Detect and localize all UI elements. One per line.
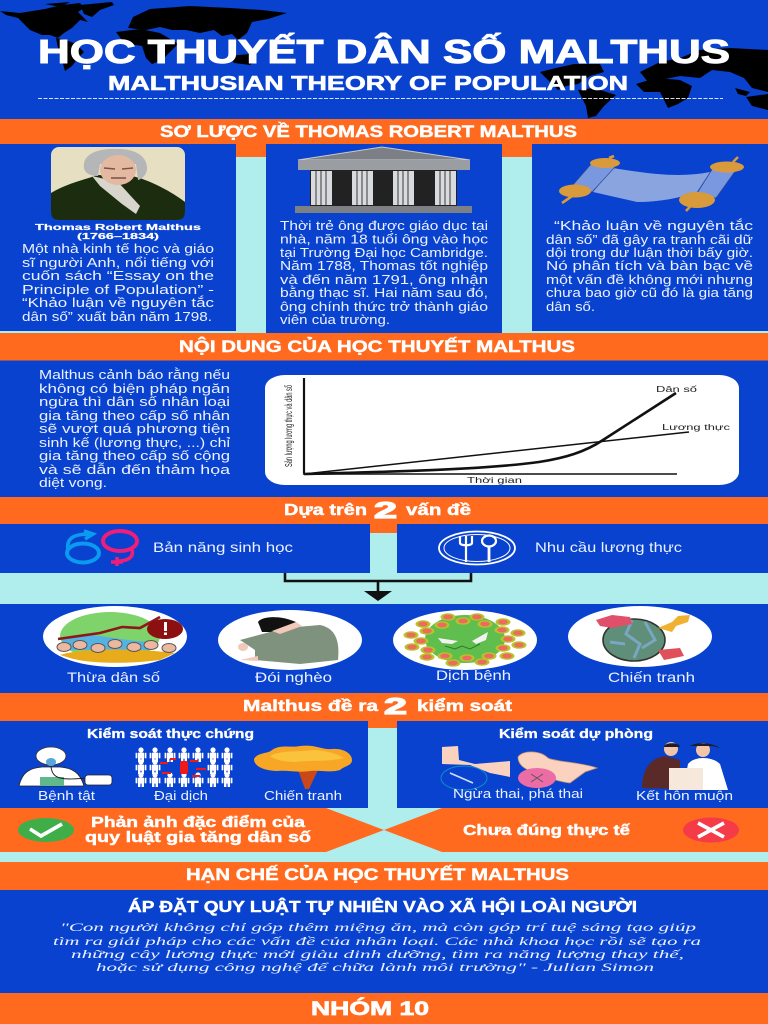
text: reflects population law [85, 814, 311, 846]
icon: gender symbols [67, 531, 137, 566]
chart labels: Sản lượng lương thực và dân số [283, 385, 295, 467]
chart labels: Dân số [656, 384, 697, 394]
icon: sick patient [19, 747, 112, 786]
icon: couple [642, 742, 728, 790]
essay text [546, 218, 754, 314]
biography text: dân số” xuất bản năm 1798. [22, 309, 212, 324]
footer: group name: NHÓM 10 [311, 998, 429, 1020]
theory text: và sẽ dẫn đến thảm họa [39, 462, 231, 477]
heading: theory content: NỘI DUNG CỦA HỌC THUYẾT MALTHUS [179, 337, 575, 356]
heading: two controls: Malthus đề ra [243, 698, 378, 715]
theory text: sẽ vượt quá phương tiện [39, 421, 230, 436]
evaluation: reflects population law [0, 808, 384, 852]
panel: preventive checks [397, 721, 768, 808]
icon: overpopulation [43, 606, 187, 667]
theory text [39, 367, 231, 490]
icon: epidemic crowd [136, 747, 232, 787]
heading: positive checks: Kiểm soát thực chứng [87, 726, 254, 741]
essay text: dội trong dư luận thời bấy giờ. [546, 245, 753, 260]
arrow: merging to consequences [285, 573, 471, 601]
essay text: chưa bao giờ cũ đó là gia tăng [546, 285, 753, 300]
labels: positive checks: Bệnh tật [38, 789, 96, 803]
theory text: gia tăng theo cấp số cộng [39, 448, 230, 463]
biography text: sĩ người Anh, nổi tiếng với [22, 255, 214, 270]
labels: positive checks: Đại dịch [154, 789, 208, 803]
quote: Julian Simon: hoặc sử dụng công nghệ để chữa lành môi trường" - Julian Simon [96, 960, 654, 974]
text: reflects population law: Phản ảnh đặc điểm của [91, 814, 306, 831]
icon: check [18, 818, 74, 842]
portrait caption [35, 223, 202, 241]
icon: cross [683, 818, 739, 842]
theory text: ngừa thì dân số nhân loại [39, 394, 230, 409]
limitation statement: ÁP ĐẶT QUY LUẬT TỰ NHIÊN VÀO XÃ HỘI LOÀI NGƯỜI [128, 896, 637, 916]
theory text: không có biện pháp ngăn [39, 381, 230, 396]
biography text: cuốn sách “Essay on the [22, 268, 214, 283]
heading: two controls [243, 693, 512, 719]
label: biological instinct: Bản năng sinh học [153, 539, 293, 555]
essay text: “Khảo luận về nguyên tắc [554, 218, 754, 233]
icon: contraception [441, 746, 597, 790]
line: population [304, 393, 676, 474]
biography text: Principle of Population” - [22, 282, 214, 297]
panel: essay [532, 144, 768, 331]
quote: Julian Simon: "Con người không chỉ góp thêm miệng ăn, mà còn góp trí tuệ sáng tạo giúp [60, 920, 696, 934]
heading: based on 2 issues: Dựa trên [284, 502, 367, 519]
education text [280, 218, 489, 327]
consequence labels [67, 667, 695, 685]
theory text: Malthus cảnh báo rằng nếu [39, 367, 230, 382]
portrait caption: Thomas Robert Malthus [35, 223, 202, 232]
icon: plate with cutlery [439, 532, 515, 564]
footer band [0, 993, 768, 1024]
heading: two controls: kiểm soát [417, 698, 512, 715]
biography text: Một nhà kinh tế học và giáo [22, 241, 214, 256]
heading: about Malthus: SƠ LƯỢC VỀ THOMAS ROBERT MALTHUS [160, 122, 577, 141]
chart labels [283, 384, 731, 485]
labels: preventive checks: Ngừa thai, phá thai [453, 787, 583, 801]
title: HỌC THUYẾT DÂN SỐ MALTHUS [38, 32, 730, 70]
quote: Julian Simon: những cây lương thực mới giàu dinh dưỡng, tìm ra năng lượng thay thế, [71, 947, 684, 961]
consequence labels: Dịch bệnh [436, 667, 511, 683]
section: limitations [0, 862, 768, 993]
text: not yet realistic: Chưa đúng thực tế [463, 822, 631, 839]
biography text: “Khảo luận về nguyên tắc [22, 295, 215, 310]
icon: poverty [218, 610, 362, 670]
biography text [22, 241, 215, 324]
essay text: một vấn đề không mới nhưng [546, 272, 753, 287]
education text: ông chính thức trở thành giáo [280, 299, 488, 314]
essay text: dân số. [546, 299, 595, 314]
heading: two controls: 2 [384, 693, 407, 719]
labels: positive checks: Chiến tranh [264, 789, 342, 803]
icon: disease virus [393, 610, 537, 670]
section: two issues [0, 497, 768, 604]
education text: tại Trường Đại học Cambridge. [280, 245, 488, 260]
line chart: population vs food [265, 375, 739, 485]
world map background [0, 2, 768, 118]
theory text: gia tăng theo cấp số nhân [39, 408, 230, 423]
education text: nhà, năm 18 tuổi ông vào học [280, 232, 489, 246]
heading: based on 2 issues [284, 497, 471, 523]
consequence labels: Chiến tranh [608, 669, 695, 685]
heading: based on 2 issues: vấn đề [406, 502, 471, 519]
subtitle: MALTHUSIAN THEORY OF POPULATION [108, 73, 628, 95]
chart labels: Thời gian [467, 475, 522, 485]
icon: scroll [559, 156, 744, 211]
quote: Julian Simon [53, 920, 701, 974]
chart labels: Lương thực [662, 422, 731, 432]
icon: university temple [295, 147, 472, 213]
heading: based on 2 issues: 2 [374, 497, 397, 523]
panel: education [266, 144, 502, 333]
section: theory content [0, 333, 768, 490]
consequence labels: Thừa dân số [67, 669, 160, 685]
section: two controls [0, 693, 768, 862]
label: food need: Nhu cầu lương thực [535, 539, 682, 555]
consequence labels: Đói nghèo [255, 669, 332, 685]
panel: biological instinct [0, 524, 370, 573]
education text: Năm 1788, Thomas tốt nghiệp [280, 258, 488, 273]
quote: Julian Simon: tìm ra giải pháp cho các vấn đề của nhân loại. Các nhà khoa học rồi sẽ tạo ra [53, 934, 701, 948]
theory text: diệt vong. [39, 475, 107, 490]
essay text: dân số” đã gây ra tranh cãi dữ [546, 232, 753, 247]
labels: preventive checks [453, 787, 733, 803]
heading: preventive checks: Kiểm soát dự phòng [499, 726, 653, 741]
labels: preventive checks: Kết hôn muộn [636, 789, 733, 803]
education text: viên của trường. [280, 312, 390, 327]
theory text: sinh kế (lương thực, ...) chỉ [39, 435, 230, 450]
panel: food need [397, 524, 768, 573]
line: food [304, 432, 689, 474]
panel: biography [0, 144, 236, 331]
section: consequences [0, 604, 768, 693]
heading: limitations: HẠN CHẾ CỦA HỌC THUYẾT MALTHUS [186, 865, 569, 884]
text: reflects population law: quy luật gia tăng dân số [85, 829, 311, 846]
portrait [51, 147, 185, 220]
essay text: Nó phân tích và bàn bạc về [546, 258, 753, 273]
panel: positive checks [0, 721, 368, 808]
section: about Thomas Robert Malthus [0, 119, 768, 333]
icon: war globe [568, 606, 712, 667]
education text: Thời trẻ ông được giáo dục tại [280, 218, 488, 233]
education text: bằng thạc sĩ. Hai năm sau đó, [280, 285, 488, 300]
labels: positive checks [38, 789, 342, 803]
education text: và đến năm 1791, ông nhận [280, 272, 488, 287]
icon: explosion [254, 746, 352, 789]
evaluation: not yet realistic [384, 808, 768, 852]
portrait caption: (1766–1834) [77, 232, 160, 241]
